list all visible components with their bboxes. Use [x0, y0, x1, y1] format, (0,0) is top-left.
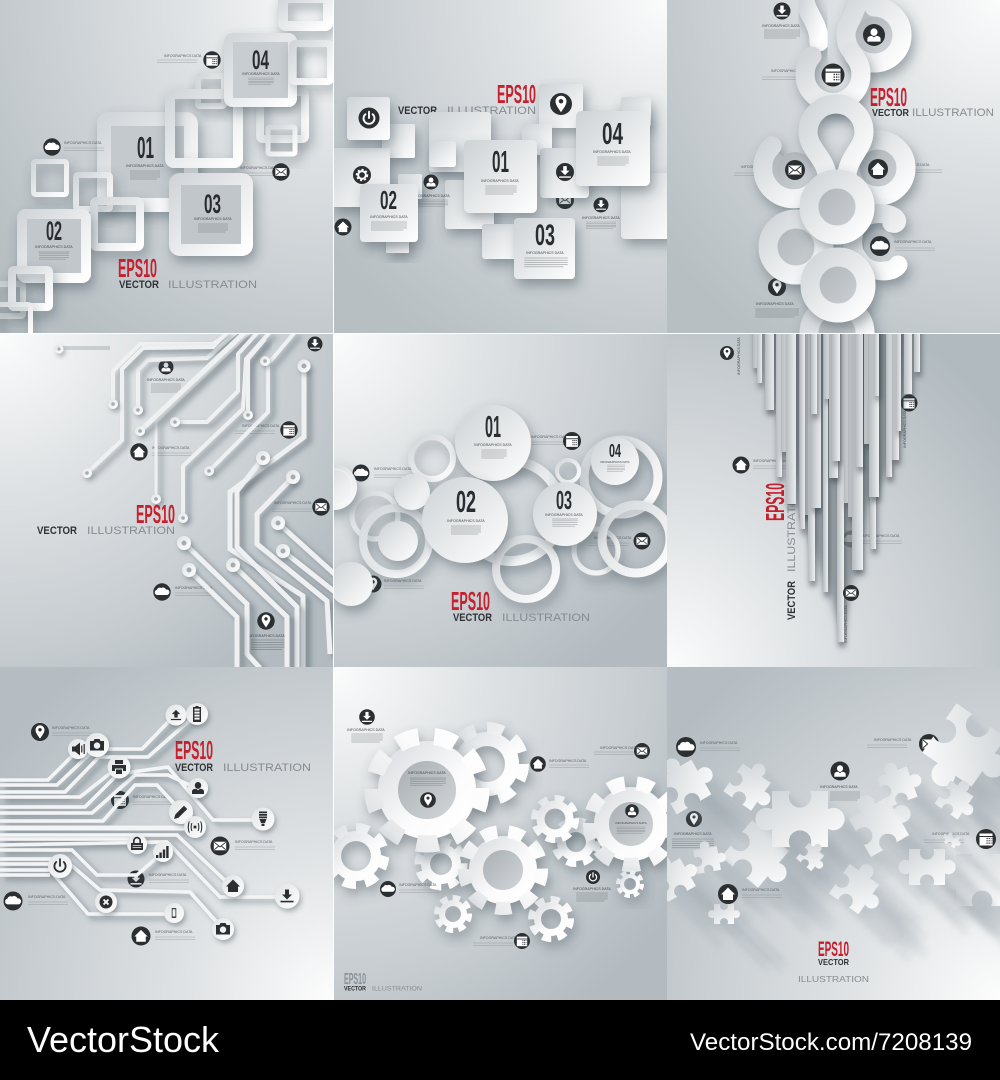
piece: small home	[708, 904, 740, 924]
piece: tiny	[941, 830, 963, 850]
labels and icons behind pieces: INFOGRAPHICS DATA	[874, 738, 912, 742]
gear: back top	[451, 728, 523, 800]
node: bulb	[252, 808, 274, 830]
card 01: 01	[492, 144, 509, 179]
icon: calendar	[280, 421, 298, 439]
frame 03	[175, 179, 247, 250]
piece: left edge	[647, 845, 704, 902]
frame 03: 03	[204, 189, 221, 219]
panel: circuit traces	[0, 329, 340, 674]
icon: home with label: INFOGRAPHICS DATA	[549, 759, 587, 763]
icon: download with text: INFOGRAPHICS DATA	[762, 24, 800, 28]
icon: cloud with label: INFOGRAPHICS DATA	[374, 467, 412, 471]
title: EPS10 vector illustration: ILLUSTRATION	[447, 105, 536, 117]
frame 01: INFOGRAPHICS DATA	[126, 164, 164, 168]
gear: right with user: INFOGRAPHICS DATA	[615, 821, 647, 825]
ribbon: bottom ring	[797, 308, 883, 333]
ribbon: cloud loop with label	[853, 213, 935, 271]
icon: home	[334, 218, 352, 236]
icon: calendar with label: INFOGRAPHICS DATA	[480, 936, 518, 940]
icon: home with label	[132, 926, 195, 946]
ribbon: lower left ring	[768, 219, 824, 275]
gear: small lower right	[532, 900, 570, 938]
frame 01: 01	[137, 130, 154, 165]
label: left text: INFOGRAPHICS DATA	[771, 69, 809, 73]
label: mail text	[734, 166, 754, 176]
icon: mail	[556, 198, 574, 209]
title: EPS10 vector illustration: ILLUSTRATION	[912, 107, 994, 119]
piece: right cluster	[935, 774, 985, 824]
gear: big with pin	[366, 729, 488, 851]
title: EPS10 vector illustration	[344, 971, 422, 992]
label: mail text	[272, 501, 312, 511]
title: EPS10 vector illustration: VECTOR	[453, 612, 492, 624]
node: lock	[127, 834, 147, 854]
frame 02: INFOGRAPHICS DATA	[35, 245, 73, 249]
label: home text: INFOGRAPHICS DATA	[892, 163, 930, 167]
footer band	[0, 1000, 1000, 1080]
gear: back middle	[419, 842, 463, 886]
piece: lower right	[898, 849, 956, 885]
icon: download	[308, 336, 322, 352]
icon: power with text	[573, 870, 611, 901]
icon: mail with label: INFOGRAPHICS DATA	[594, 536, 632, 540]
title: EPS10 vector illustration rotated	[760, 483, 798, 620]
node trail: upper left short trace	[54, 344, 110, 354]
title: EPS10 vector illustration: EPS10	[451, 586, 490, 616]
shaded backing behind bars	[767, 329, 907, 634]
icon: home with label: INFOGRAPHICS DATA	[753, 459, 791, 463]
icon: cloud with label	[842, 530, 902, 548]
title: EPS10 vector illustration	[870, 82, 994, 119]
title: EPS10 vector illustration: VECTOR	[119, 279, 159, 291]
labels and icons behind pieces: INFOGRAPHICS DATA	[820, 785, 858, 789]
label: cloud text	[175, 586, 215, 595]
label: home text	[915, 164, 942, 173]
ribbon: S curve lower ring	[809, 179, 865, 235]
panel: hanging bars	[667, 324, 1000, 667]
label: pin text	[247, 634, 285, 650]
disc 02: 02	[456, 484, 476, 519]
card 04: 04	[602, 116, 623, 151]
card 02	[360, 184, 418, 242]
frame 03: INFOGRAPHICS DATA	[194, 217, 232, 221]
title: EPS10 vector illustration: VECTOR	[344, 986, 367, 992]
label: pin text: INFOGRAPHICS DATA	[247, 634, 285, 638]
icon: cloud with label: INFOGRAPHICS DATA	[28, 895, 66, 899]
icon: download with label: INFOGRAPHICS DATA	[149, 873, 187, 877]
panel: puzzle pieces	[647, 667, 1000, 1000]
title: EPS10 vector illustration: VECTOR	[398, 105, 437, 117]
icon: pin	[550, 93, 572, 115]
disc 04	[591, 437, 639, 485]
title: EPS10 vector illustration: ILLUSTRATION	[502, 612, 590, 624]
icon: calendar with label	[473, 933, 530, 949]
icon: home	[130, 443, 148, 461]
card 01	[464, 140, 537, 213]
labels and icons behind pieces: INFOGRAPHICS DATA	[700, 741, 738, 745]
gear: back right	[555, 821, 597, 863]
piece: left lower small	[692, 838, 728, 874]
frame 01	[104, 119, 191, 205]
node: bars	[153, 842, 173, 862]
disc 02	[422, 477, 508, 563]
title: EPS10 vector illustration: EPS10	[870, 82, 907, 112]
icon: download with text: INFOGRAPHICS DATA	[347, 728, 385, 732]
label: calendar text	[235, 424, 280, 433]
icon: home with label	[718, 884, 782, 904]
label: calendar text: INFOGRAPHICS DATA	[242, 424, 280, 428]
icon: home with label	[732, 456, 793, 474]
panel: loop ribbons	[667, 0, 1000, 361]
panel: hanging bars: EPS10	[760, 483, 790, 521]
icon: user with text: INFOGRAPHICS DATA	[412, 194, 450, 198]
disc 04: 04	[609, 441, 621, 461]
node: pencil	[169, 800, 193, 824]
gear: small lower left	[437, 898, 469, 930]
piece: lower far right	[941, 854, 1000, 906]
card 02: INFOGRAPHICS DATA	[370, 215, 408, 219]
label: home text	[152, 446, 192, 455]
icon: home with label: INFOGRAPHICS DATA	[155, 930, 193, 934]
node: camera	[85, 733, 109, 757]
node: home	[222, 875, 244, 897]
icon: cloud with label: INFOGRAPHICS DATA	[399, 883, 437, 887]
piece: lower centre	[829, 855, 894, 920]
icon: download	[556, 163, 574, 181]
title: EPS10 vector illustration: VECTOR	[175, 762, 213, 774]
gear: big with pin: INFOGRAPHICS DATA	[408, 771, 446, 775]
piece: right of centre	[842, 779, 920, 857]
disc 03: 03	[556, 485, 572, 515]
title: EPS10 vector illustration: ILLUSTRATION	[372, 986, 422, 992]
paper discs	[311, 464, 430, 561]
icon: cloud with label	[380, 881, 439, 897]
disc 04: INFOGRAPHICS DATA	[600, 460, 630, 464]
ribbon: home ring	[850, 140, 906, 196]
gear: right with user	[585, 778, 677, 870]
icon: pin with label	[31, 723, 92, 741]
title: EPS10 vector illustration: EPS10	[118, 253, 157, 283]
title: EPS10 vector illustration	[451, 586, 590, 624]
title: EPS10 vector illustration: VECTOR	[37, 525, 77, 537]
title: EPS10 vector illustration: ILLUSTRATION	[798, 974, 869, 984]
icon: pin with label: INFOGRAPHICS DATA	[384, 579, 422, 583]
icon: pin	[257, 612, 275, 630]
panel: rounded square frames	[0, 0, 333, 338]
node: camera lower	[212, 918, 234, 940]
disc 01: 01	[485, 409, 501, 444]
icon: calendar with label: INFOGRAPHICS DATA	[164, 54, 202, 58]
ribbon: lower middle ring	[810, 257, 866, 313]
icon: mail with vertical label	[843, 585, 859, 643]
title: EPS10 vector illustration: EPS10	[344, 971, 366, 988]
icon: calendar with vertical label: INFOGRAPHICS DATA	[903, 410, 907, 448]
card 04: INFOGRAPHICS DATA	[593, 150, 631, 154]
title: EPS10 vector illustration: VECTOR	[818, 957, 849, 967]
disc 01: INFOGRAPHICS DATA	[474, 443, 512, 447]
card 01: INFOGRAPHICS DATA	[481, 179, 519, 183]
icon: mail with label	[589, 536, 632, 545]
icon: cloud with label	[43, 138, 104, 156]
icon: mail	[634, 532, 650, 550]
icon: home with label: INFOGRAPHICS DATA	[742, 888, 780, 892]
title: EPS10 vector illustration	[798, 938, 869, 984]
ribbon: S curve top loop	[808, 104, 864, 178]
title: EPS10 vector illustration	[175, 735, 311, 774]
footer url text: VectorStock.com/7208139	[690, 1029, 972, 1056]
icon: cloud	[153, 583, 171, 601]
frame 04: 04	[252, 45, 269, 75]
frame 04: INFOGRAPHICS DATA	[242, 72, 280, 76]
card 02: 02	[380, 185, 397, 215]
title: EPS10 vector illustration: ILLUSTRATION	[168, 279, 257, 291]
icon: mail with label	[210, 836, 275, 856]
panel: paper squares	[332, 0, 674, 333]
icon: pin with text	[755, 278, 799, 317]
icon: download with label	[128, 870, 189, 888]
piece: left	[651, 743, 722, 814]
ribbon: top left strand	[804, 0, 819, 42]
panel: paper squares: EPS10	[497, 79, 536, 109]
icon: calendar with label	[111, 791, 173, 809]
icon: user with text	[418, 174, 450, 207]
label: home text: INFOGRAPHICS DATA	[152, 446, 190, 450]
card 03: 03	[535, 219, 555, 252]
icon: download with text: INFOGRAPHICS DATA	[582, 216, 620, 220]
card 04	[576, 111, 650, 186]
icon: download with text	[347, 709, 385, 742]
node: wifi	[184, 816, 206, 838]
title: EPS10 vector illustration: EPS10	[175, 735, 213, 765]
piece: upper left small	[723, 755, 785, 816]
piece: large top right	[912, 703, 1000, 812]
bars	[753, 324, 920, 642]
node: printer	[108, 756, 130, 778]
ribbon: calendar loop	[805, 56, 861, 103]
label: mail text: INFOGRAPHICS DATA	[274, 501, 312, 505]
icon: cloud with label: INFOGRAPHICS DATA	[862, 534, 900, 538]
gear: left	[328, 828, 384, 884]
icon: calendar with label	[157, 51, 221, 69]
title: EPS10 vector illustration	[118, 258, 256, 288]
icon: calendar with label: INFOGRAPHICS DATA	[531, 435, 569, 439]
icon: calendar	[976, 829, 996, 849]
icon: download with text	[582, 198, 620, 228]
frame 04	[228, 38, 292, 102]
icon: mail with label: INFOGRAPHICS DATA	[600, 746, 638, 750]
icon: mail with label	[594, 743, 650, 759]
icon: download with text	[762, 2, 800, 38]
frame 02: 02	[46, 216, 62, 246]
frame 02	[22, 214, 86, 278]
icon: mail with label	[240, 163, 290, 181]
trace nodes	[82, 356, 310, 577]
panel: paper gears	[328, 667, 677, 1000]
icon: home with label	[530, 756, 589, 772]
icon: cloud with label: INFOGRAPHICS DATA	[64, 141, 102, 145]
icon: gear	[353, 166, 371, 184]
ribbon: cloud loop with label: INFOGRAPHICS DATA	[894, 240, 932, 244]
gear: tiny right	[618, 872, 642, 896]
icon: power	[347, 97, 390, 140]
icon: calendar with vertical label	[900, 394, 918, 448]
node: speaker	[68, 739, 88, 759]
node: up arrow	[166, 704, 186, 726]
footer logo text: VectorStock	[27, 1019, 220, 1060]
icon: pin with label: INFOGRAPHICS DATA	[52, 726, 90, 730]
piece: centre	[755, 791, 845, 847]
icon: pin with vertical label	[720, 337, 741, 375]
icon: calendar with label: INFOGRAPHICS DATA	[133, 795, 171, 799]
disc 03: INFOGRAPHICS DATA	[545, 513, 583, 517]
title: EPS10 vector illustration rotated: VECTOR	[786, 581, 798, 620]
disc 02: INFOGRAPHICS DATA	[447, 519, 485, 523]
panel: circuit with round nodes	[0, 667, 333, 1000]
node: user	[188, 778, 208, 798]
icon: cloud with label	[3, 892, 68, 910]
label: user text	[147, 360, 185, 392]
panel: circuit traces: EPS10	[136, 499, 175, 529]
label: left text	[762, 70, 796, 80]
node: battery	[186, 703, 208, 725]
piece: upper right small	[873, 754, 926, 808]
icon: mail with label: INFOGRAPHICS DATA	[240, 166, 278, 170]
icon: mail with label: INFOGRAPHICS DATA	[235, 840, 273, 844]
icon: calendar with label	[524, 432, 581, 450]
title: EPS10 vector illustration	[37, 499, 175, 537]
gear: centre	[460, 827, 546, 913]
piece: diagonal left centre	[721, 809, 809, 897]
title: EPS10 vector illustration: EPS10	[818, 938, 849, 961]
traces	[0, 714, 287, 929]
node: power	[48, 854, 72, 878]
icon: pin with label	[364, 576, 424, 592]
label: mail text: INFOGRAPHICS DATA	[741, 165, 779, 169]
node: close	[95, 891, 117, 913]
label: user text: INFOGRAPHICS DATA	[147, 378, 185, 382]
title: EPS10 vector illustration: VECTOR	[872, 107, 909, 119]
icon: power with text: INFOGRAPHICS DATA	[573, 887, 611, 891]
title: EPS10 vector illustration: ILLUSTRATION	[87, 525, 175, 537]
traces group	[87, 329, 340, 674]
icon: cloud with label	[352, 464, 414, 482]
panel: paper circles	[311, 334, 670, 667]
ribbon: mail ring	[763, 146, 815, 199]
icon: pin with vertical label: INFOGRAPHICS DATA	[737, 337, 741, 375]
ribbon: top right loop with user icon	[846, 0, 902, 63]
title: EPS10 vector illustration rotated: ILLUSTRATION	[786, 484, 798, 572]
card 03	[514, 218, 575, 279]
labels and icons behind pieces: INFOGRAPHICS DATA	[932, 832, 970, 836]
node: phone	[164, 903, 184, 923]
title: EPS10 vector illustration	[398, 84, 536, 114]
title: EPS10 vector illustration: ILLUSTRATION	[223, 762, 311, 774]
label: cloud text: INFOGRAPHICS DATA	[175, 586, 213, 590]
card 03: INFOGRAPHICS DATA	[526, 251, 564, 255]
icon: mail	[312, 498, 330, 516]
disc 01	[455, 405, 531, 481]
disc 03	[533, 482, 597, 546]
icon: pin with text: INFOGRAPHICS DATA	[756, 302, 794, 306]
icon: mail with vertical label: INFOGRAPHICS DATA	[844, 605, 848, 643]
labels and icons behind pieces: INFOGRAPHICS DATA	[674, 832, 712, 836]
piece: small under centre	[796, 838, 832, 875]
gear: mid right	[534, 798, 576, 840]
labels and icons behind pieces	[672, 734, 970, 848]
node: download	[274, 884, 300, 908]
